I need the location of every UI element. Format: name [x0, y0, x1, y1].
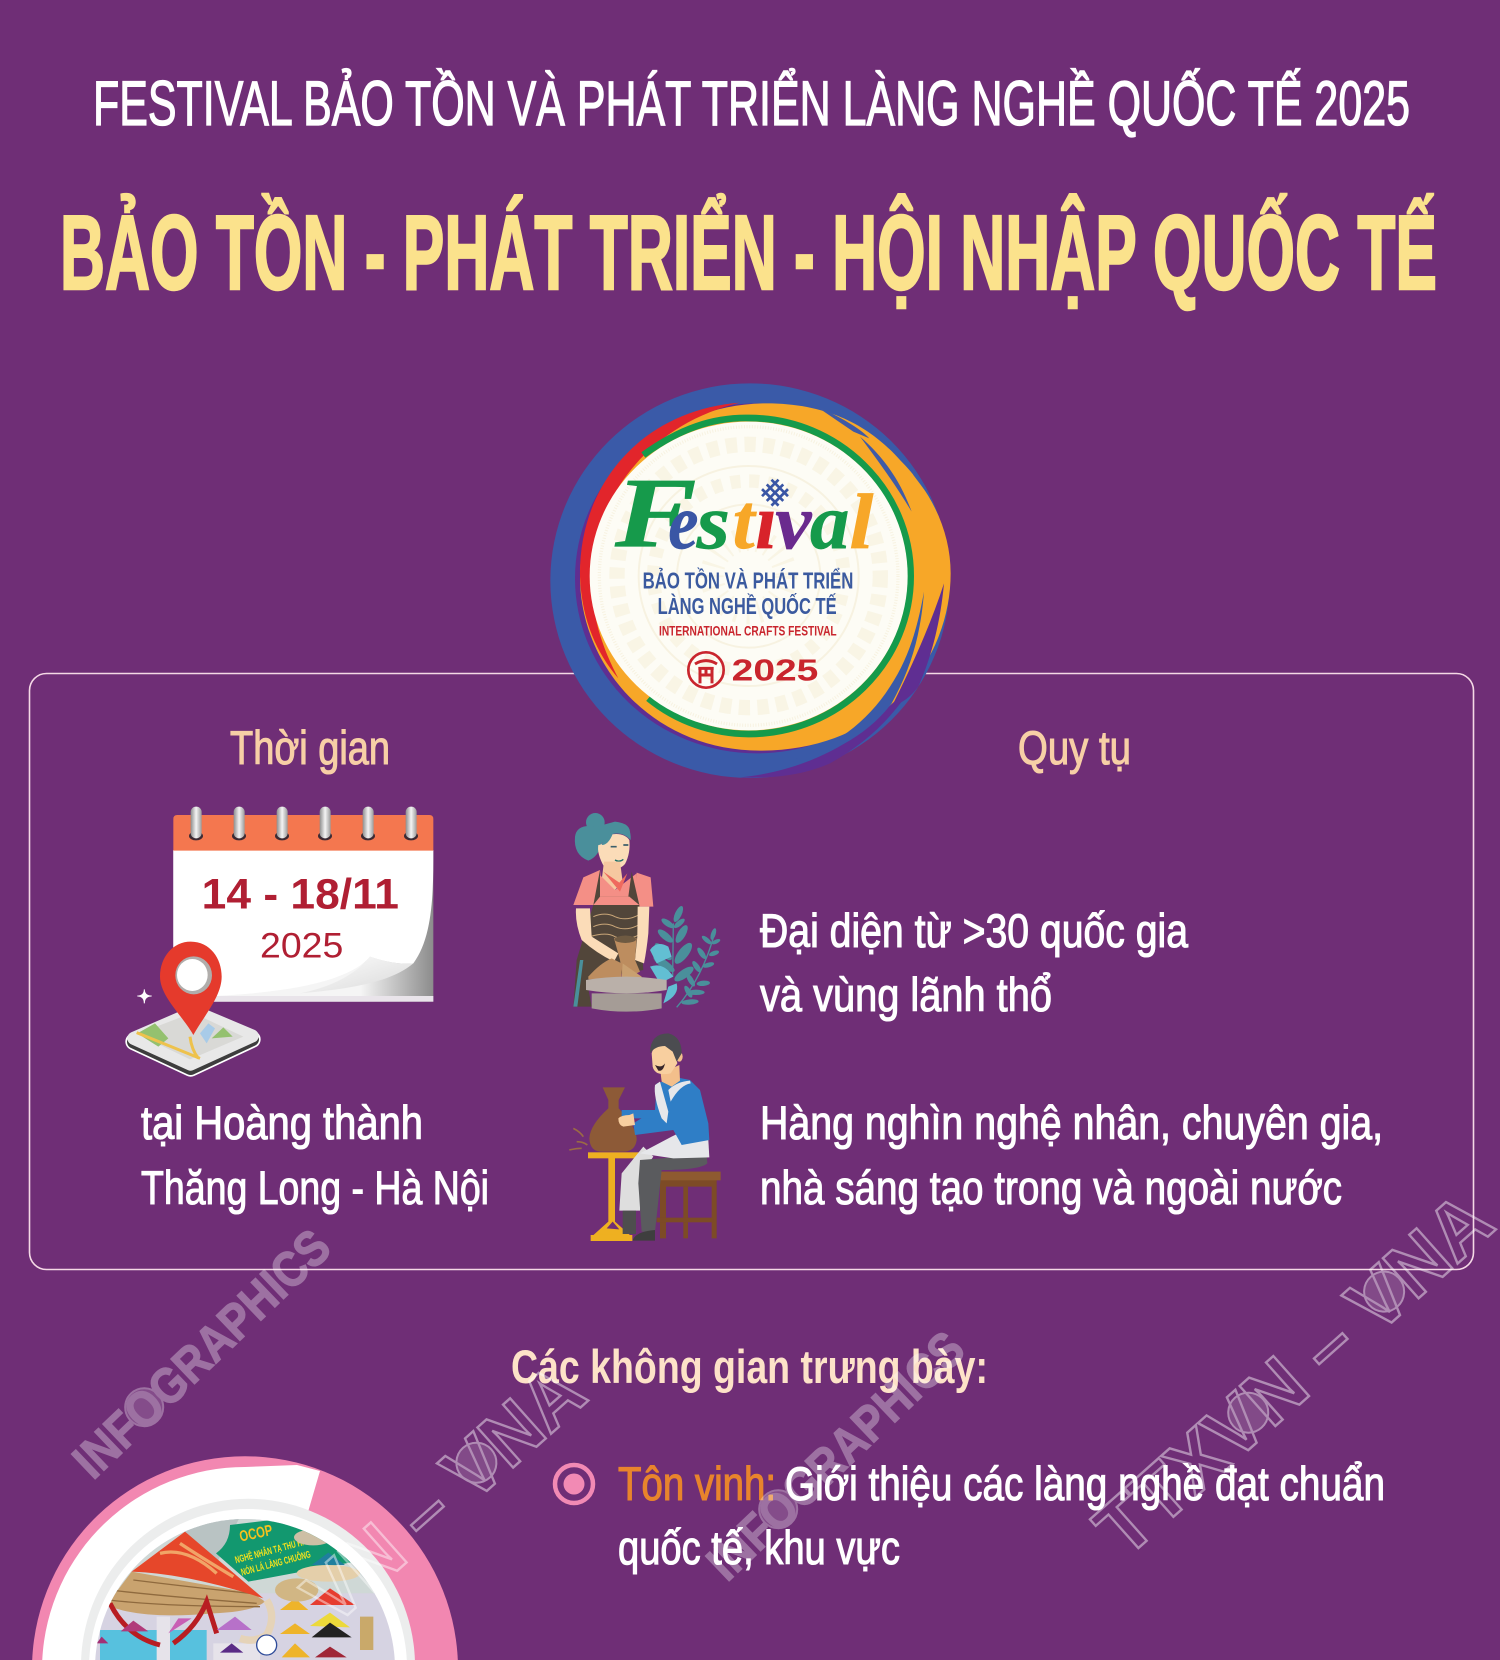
plant leaves [651, 905, 721, 1007]
OCOP banner: NGHỆ NHÂN TẠ THU HÀ [233, 1535, 308, 1566]
logo text: BẢO TỒN VÀ PHÁT TRIỂN [643, 565, 853, 593]
knot icon [758, 476, 791, 509]
wordmark: Festival: e [668, 478, 698, 565]
icon: man at pottery wheel [569, 1033, 721, 1241]
icon: map and pin [134, 942, 252, 1068]
logo: festival emblem: LÀNG NGHỀ QUỐC TẾ [658, 592, 837, 619]
wordmark: Festival: s [696, 478, 730, 565]
text: venue: Thăng Long - Hà Nội [141, 1161, 489, 1214]
OCOP banner: NÓN LÁ LÀNG CHUÔNG [239, 1547, 312, 1579]
wordmark: Festival [614, 458, 874, 569]
wordmark: Festival: t [733, 478, 757, 565]
text: artisans: nhà sáng tạo trong và ngoài nước [760, 1161, 1342, 1214]
heading: exhibition spaces: Các không gian trưng bày: [511, 1340, 988, 1393]
heading: participants: Quy tụ [1018, 721, 1131, 774]
wordmark: Festival: a [810, 478, 849, 565]
icon: woman potter with plant [573, 813, 721, 1012]
heading: time: Thời gian [230, 721, 390, 774]
logo: festival emblem: INTERNATIONAL CRAFTS FESTIVAL [659, 622, 837, 638]
bronze drum pattern [599, 427, 898, 725]
OCOP banner [216, 1517, 355, 1582]
binder rings [189, 807, 418, 840]
text: venue [141, 1096, 489, 1214]
date: 14 - 18/11 [202, 870, 399, 918]
wordmark: Festival: v [775, 478, 813, 565]
text: representatives: Đại diện từ >30 quốc gia [760, 904, 1189, 957]
watermark: infographics left: INFOGRAPHICS [62, 1218, 341, 1489]
logo: festival emblem: 2025 [732, 654, 818, 688]
photo circle: craft village hats [32, 1456, 458, 1660]
text: venue: tại Hoàng thành [141, 1096, 423, 1149]
wordmark: Festival: ı [755, 478, 777, 565]
big conical hat [107, 1532, 272, 1645]
text: honour description: Giới thiệu các làng nghề đạt chuẩn [785, 1457, 1385, 1510]
bullet [555, 1465, 593, 1503]
year: 2025 [260, 927, 343, 966]
small hanging hats [97, 1529, 373, 1657]
text: artisans [760, 1096, 1383, 1214]
icon: calendar [134, 807, 433, 1068]
text: artisans: Hàng nghìn nghệ nhân, chuyên gia, [760, 1096, 1383, 1149]
watermark: VN VNA left: VN – VNA [286, 1346, 601, 1641]
photo [95, 1517, 395, 1660]
logo: festival emblem [550, 383, 951, 778]
text: honour description [618, 1457, 1385, 1574]
watermark: infographics center: INFOGRAPHICS [696, 1320, 975, 1591]
wordmark: Festival: F [614, 458, 697, 569]
OCOP banner: OCOP [238, 1522, 274, 1546]
icon: Hanoi gate [688, 652, 724, 688]
text: representatives: và vùng lãnh thổ [760, 968, 1052, 1021]
wordmark: Festival: l [849, 478, 874, 565]
panel: information frame [30, 674, 1474, 1270]
text: representatives [760, 904, 1189, 1021]
text: honour description: quốc tế, khu vực [618, 1521, 900, 1574]
text: honour label: Tôn vinh: [618, 1457, 776, 1510]
